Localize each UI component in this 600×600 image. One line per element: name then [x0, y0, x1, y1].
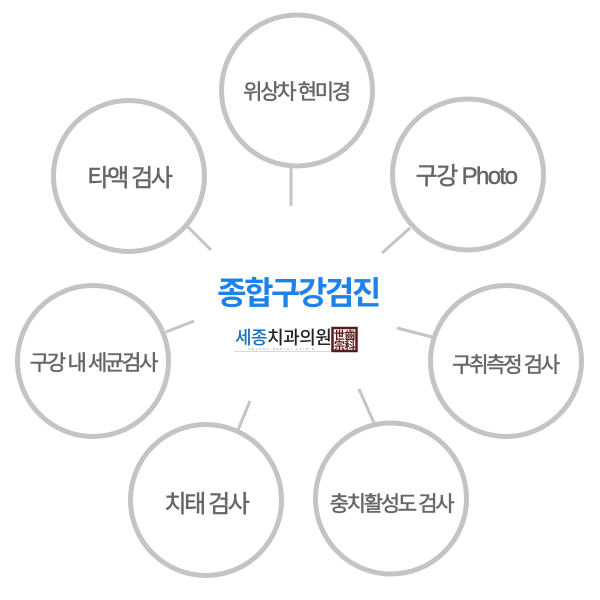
node: oral bacteria test	[18, 286, 194, 436]
logo underline	[234, 351, 330, 352]
logo seal	[332, 327, 356, 354]
node: plaque test: 치태 검사	[164, 491, 250, 518]
logo wordmark: 세종치과의원	[235, 328, 331, 348]
node: plaque test	[130, 401, 282, 576]
title: 종합구강검진	[217, 275, 379, 311]
node: bad breath measurement: 구취측정 검사	[452, 354, 560, 377]
node: saliva test	[54, 100, 211, 252]
node: phase contrast microscope: 위상차 현미경	[243, 81, 349, 104]
logo seal: 世齒	[334, 327, 355, 343]
logo tagline: SEJONG DENTAL CLINIC	[248, 347, 316, 351]
node: phase contrast microscope	[222, 15, 372, 206]
node: oral photo: 구강 Photo	[416, 163, 518, 190]
clinic logo	[234, 327, 356, 354]
node: caries activity test	[316, 389, 466, 574]
logo seal: 宗科	[334, 338, 355, 354]
node: oral photo	[382, 99, 544, 253]
node: saliva test: 타액 검사	[88, 165, 173, 192]
node: caries activity test: 충치활성도 검사	[330, 493, 454, 516]
node: oral bacteria test: 구강 내 세균검사	[30, 352, 158, 375]
node: bad breath measurement	[397, 286, 582, 436]
